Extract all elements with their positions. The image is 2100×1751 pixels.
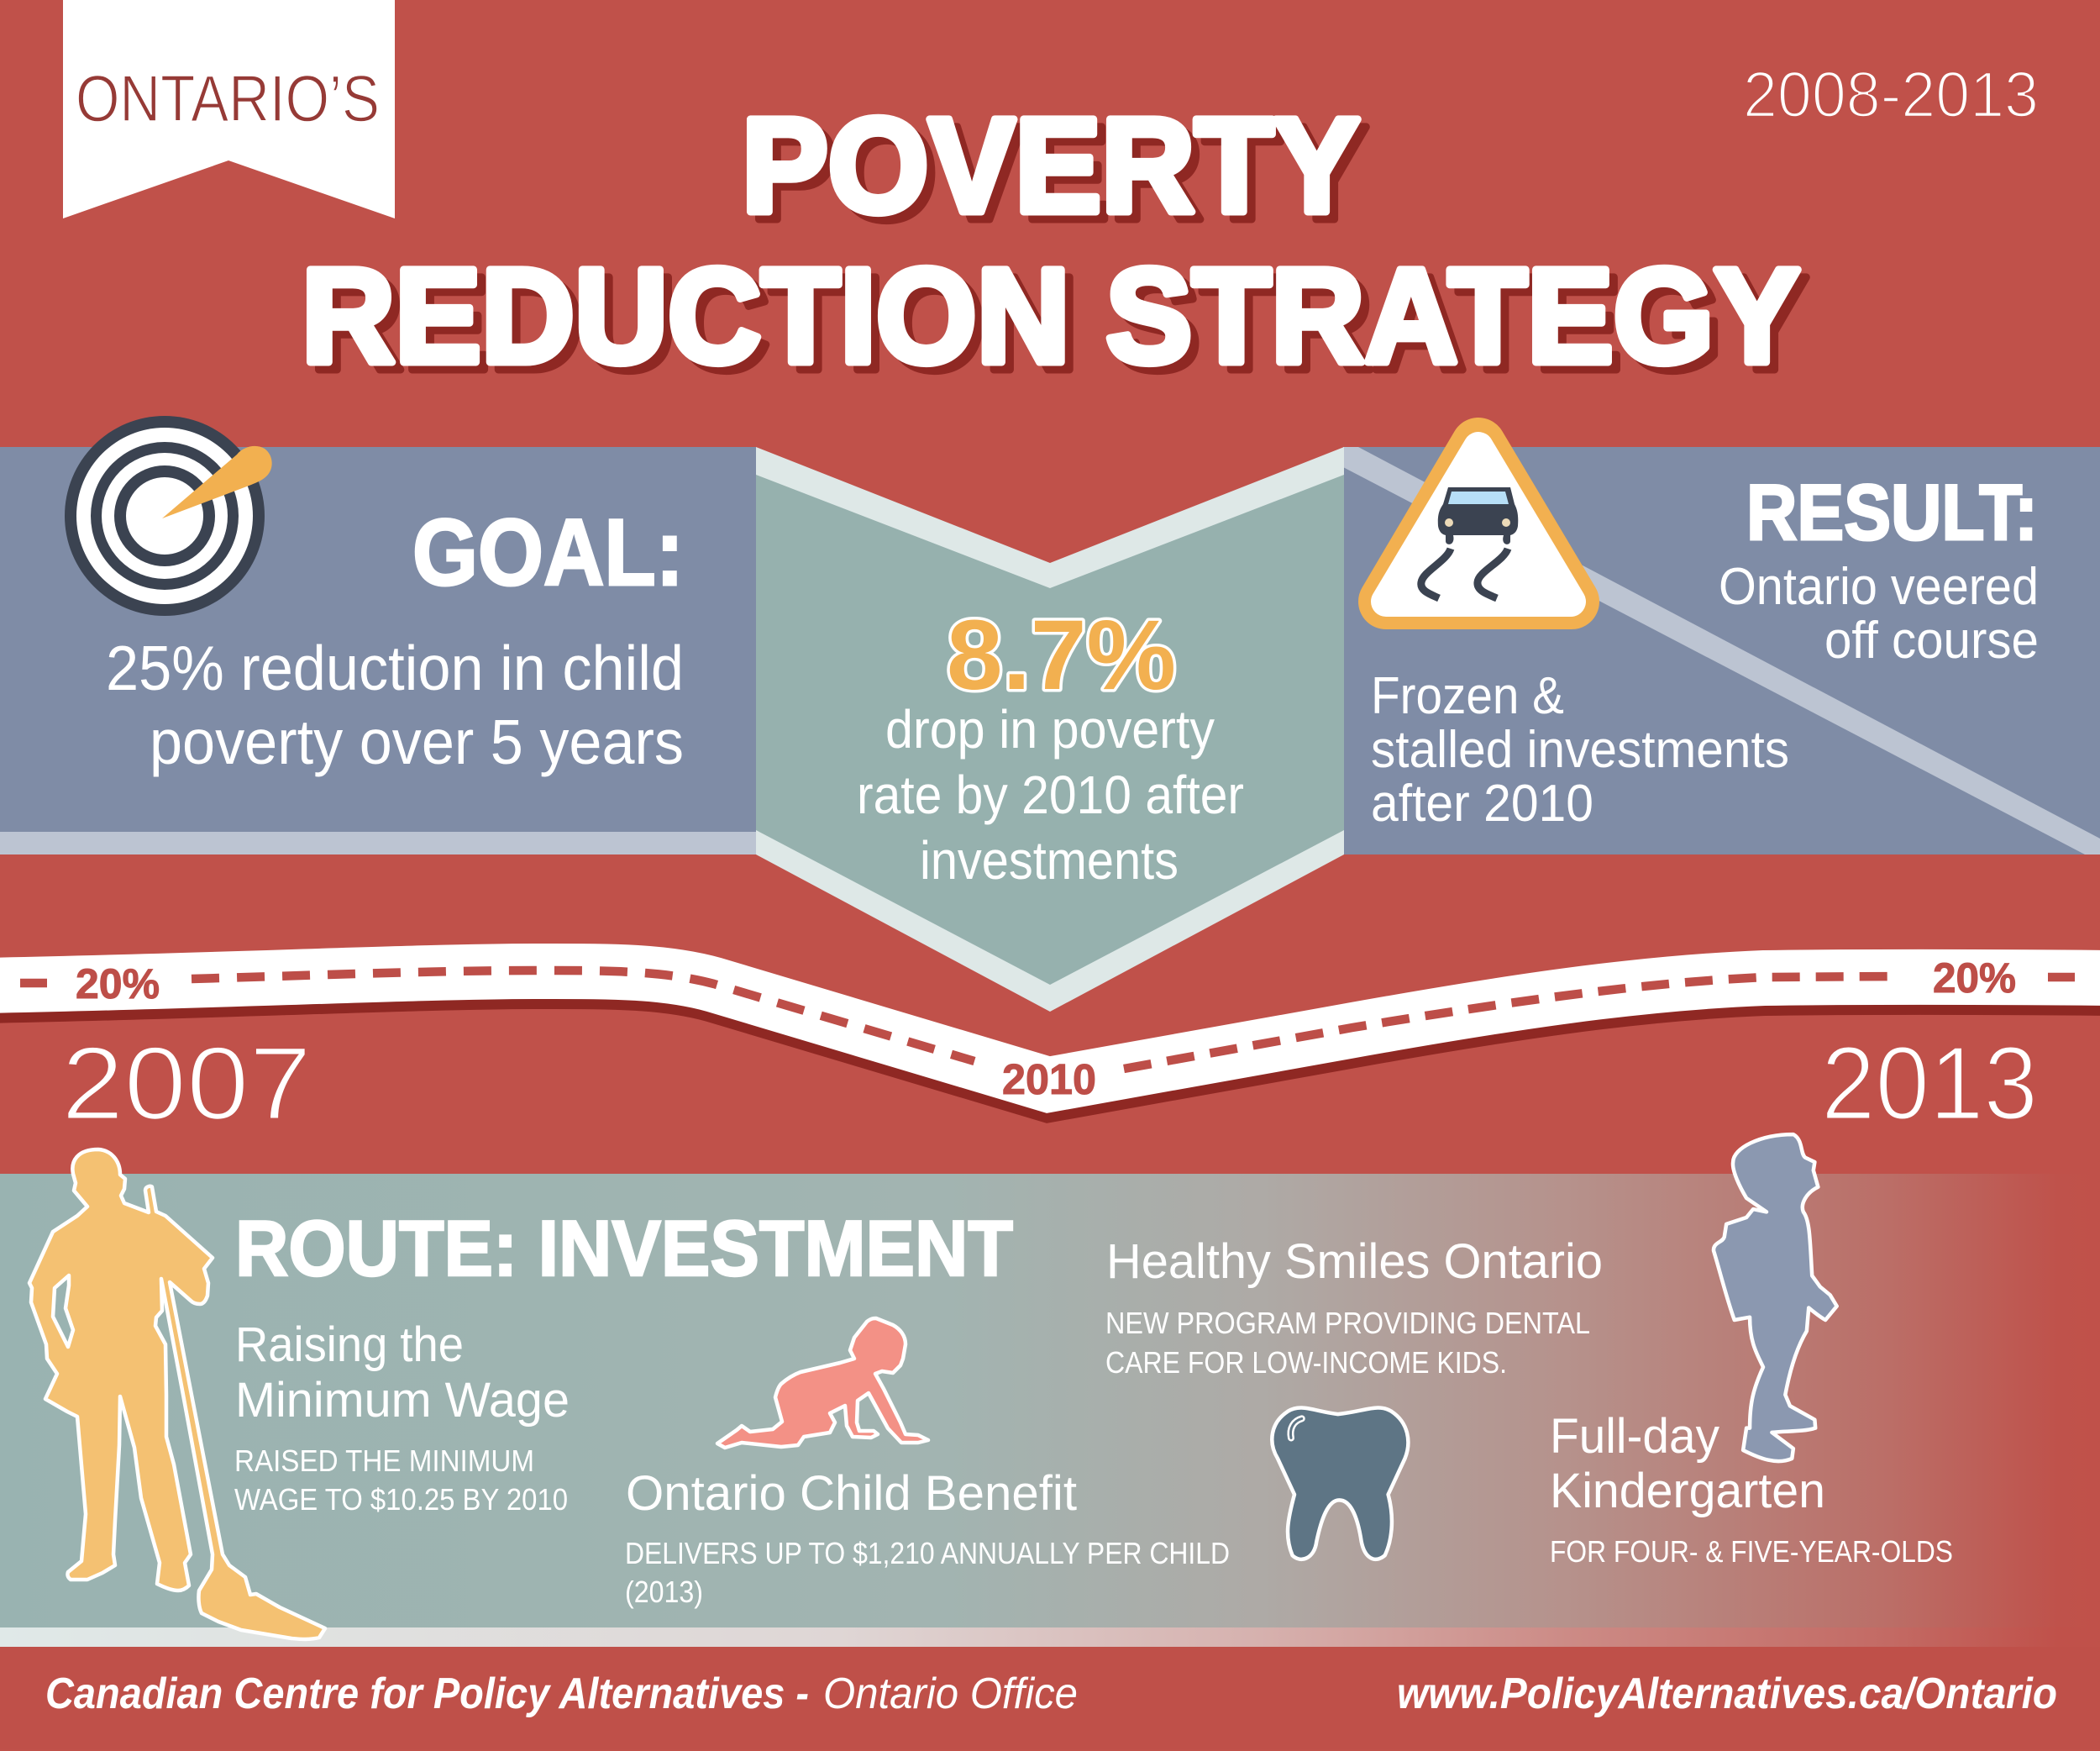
item: minimum wage: Minimum Wage bbox=[235, 1373, 570, 1428]
goal text: 25% reduction in child bbox=[106, 633, 684, 703]
result text bbox=[1719, 558, 2039, 670]
item: minimum wage: WAGE TO $10.25 BY 2010 bbox=[234, 1482, 568, 1517]
footer: office: Ontario Office bbox=[823, 1669, 1078, 1718]
item: minimum wage: Raising the bbox=[235, 1317, 464, 1372]
result text: Ontario veered bbox=[1719, 558, 2039, 616]
icon: crawling baby bbox=[717, 1318, 928, 1448]
goal text: poverty over 5 years bbox=[150, 707, 684, 777]
road label: 2010: 2010 bbox=[1002, 1055, 1096, 1103]
panel: 8.7 percent chevron bbox=[756, 447, 1344, 1012]
investments text: Frozen & bbox=[1371, 667, 1564, 725]
icon: tooth bbox=[1272, 1408, 1408, 1559]
title: REDUCTION STRATEGY bbox=[302, 240, 1800, 391]
item: minimum wage bbox=[234, 1317, 570, 1517]
heading: result: RESULT: bbox=[1746, 468, 2038, 556]
title: POVERTY bbox=[742, 90, 1360, 240]
investments text: stalled investments bbox=[1371, 721, 1789, 779]
item: healthy smiles bbox=[1105, 1234, 1603, 1380]
item: child benefit: DELIVERS UP TO $1,210 ANNUALLY PER CHILD bbox=[625, 1536, 1230, 1570]
item: minimum wage: RAISED THE MINIMUM bbox=[234, 1443, 534, 1478]
item: child benefit bbox=[625, 1466, 1230, 1609]
item: full-day kindergarten: Full-day bbox=[1550, 1409, 1719, 1464]
road label: 20% right: 20% bbox=[1933, 954, 2016, 1002]
year 2013: 2013 bbox=[1821, 1026, 2038, 1142]
goal text bbox=[106, 633, 684, 777]
lane dashes bbox=[20, 970, 2075, 1069]
footer: website: www.PolicyAlternatives.ca/Ontario bbox=[1397, 1669, 2057, 1718]
stat description: investments bbox=[920, 830, 1179, 891]
item: full-day kindergarten: Kindergarten bbox=[1550, 1464, 1825, 1518]
panel: result bbox=[1343, 445, 2100, 854]
icon: slippery road sign bbox=[1386, 445, 1572, 602]
panel: route investment bbox=[0, 1134, 2100, 1647]
stat description: drop in poverty bbox=[885, 699, 1215, 760]
stat description: rate by 2010 after bbox=[857, 765, 1244, 825]
diagonal road stripe bbox=[1343, 447, 2100, 854]
investments text: after 2010 bbox=[1371, 775, 1593, 833]
banner: Ontario's bbox=[63, 0, 395, 218]
stat: 8.7%: 8.7% bbox=[947, 600, 1176, 711]
item: child benefit: Ontario Child Benefit bbox=[626, 1466, 1077, 1521]
icon: child with backpack bbox=[1714, 1134, 1837, 1461]
year 2007: 2007 bbox=[61, 1026, 312, 1142]
footer: organisation: Canadian Centre for Policy Alternatives - bbox=[45, 1669, 809, 1718]
road bbox=[0, 954, 2100, 1103]
item: healthy smiles: CARE FOR LOW-INCOME KIDS. bbox=[1105, 1345, 1507, 1380]
icon: target with dart bbox=[65, 416, 272, 616]
panel: goal bbox=[0, 416, 756, 854]
result text: off course bbox=[1824, 612, 2039, 670]
banner: Ontario's: ONTARIO’S bbox=[76, 61, 380, 135]
item: healthy smiles: Healthy Smiles Ontario bbox=[1106, 1234, 1603, 1289]
heading: route investment: ROUTE: INVESTMENT bbox=[235, 1204, 1013, 1292]
investments text bbox=[1371, 667, 1789, 833]
item: healthy smiles: NEW PROGRAM PROVIDING DENTAL bbox=[1105, 1306, 1590, 1340]
footer bbox=[0, 1647, 2100, 1749]
item: child benefit: (2013) bbox=[625, 1575, 703, 1609]
item: full-day kindergarten: FOR FOUR- & FIVE-YEAR-OLDS bbox=[1550, 1534, 1953, 1569]
road label: 20% left: 20% bbox=[76, 960, 160, 1007]
stat description bbox=[857, 699, 1244, 891]
icon: worker with broom bbox=[29, 1149, 325, 1639]
item: full-day kindergarten bbox=[1550, 1409, 1953, 1569]
heading: goal: GOAL: bbox=[412, 500, 684, 605]
date range: 2008-2013 bbox=[1743, 59, 2039, 131]
title bbox=[302, 90, 1800, 391]
